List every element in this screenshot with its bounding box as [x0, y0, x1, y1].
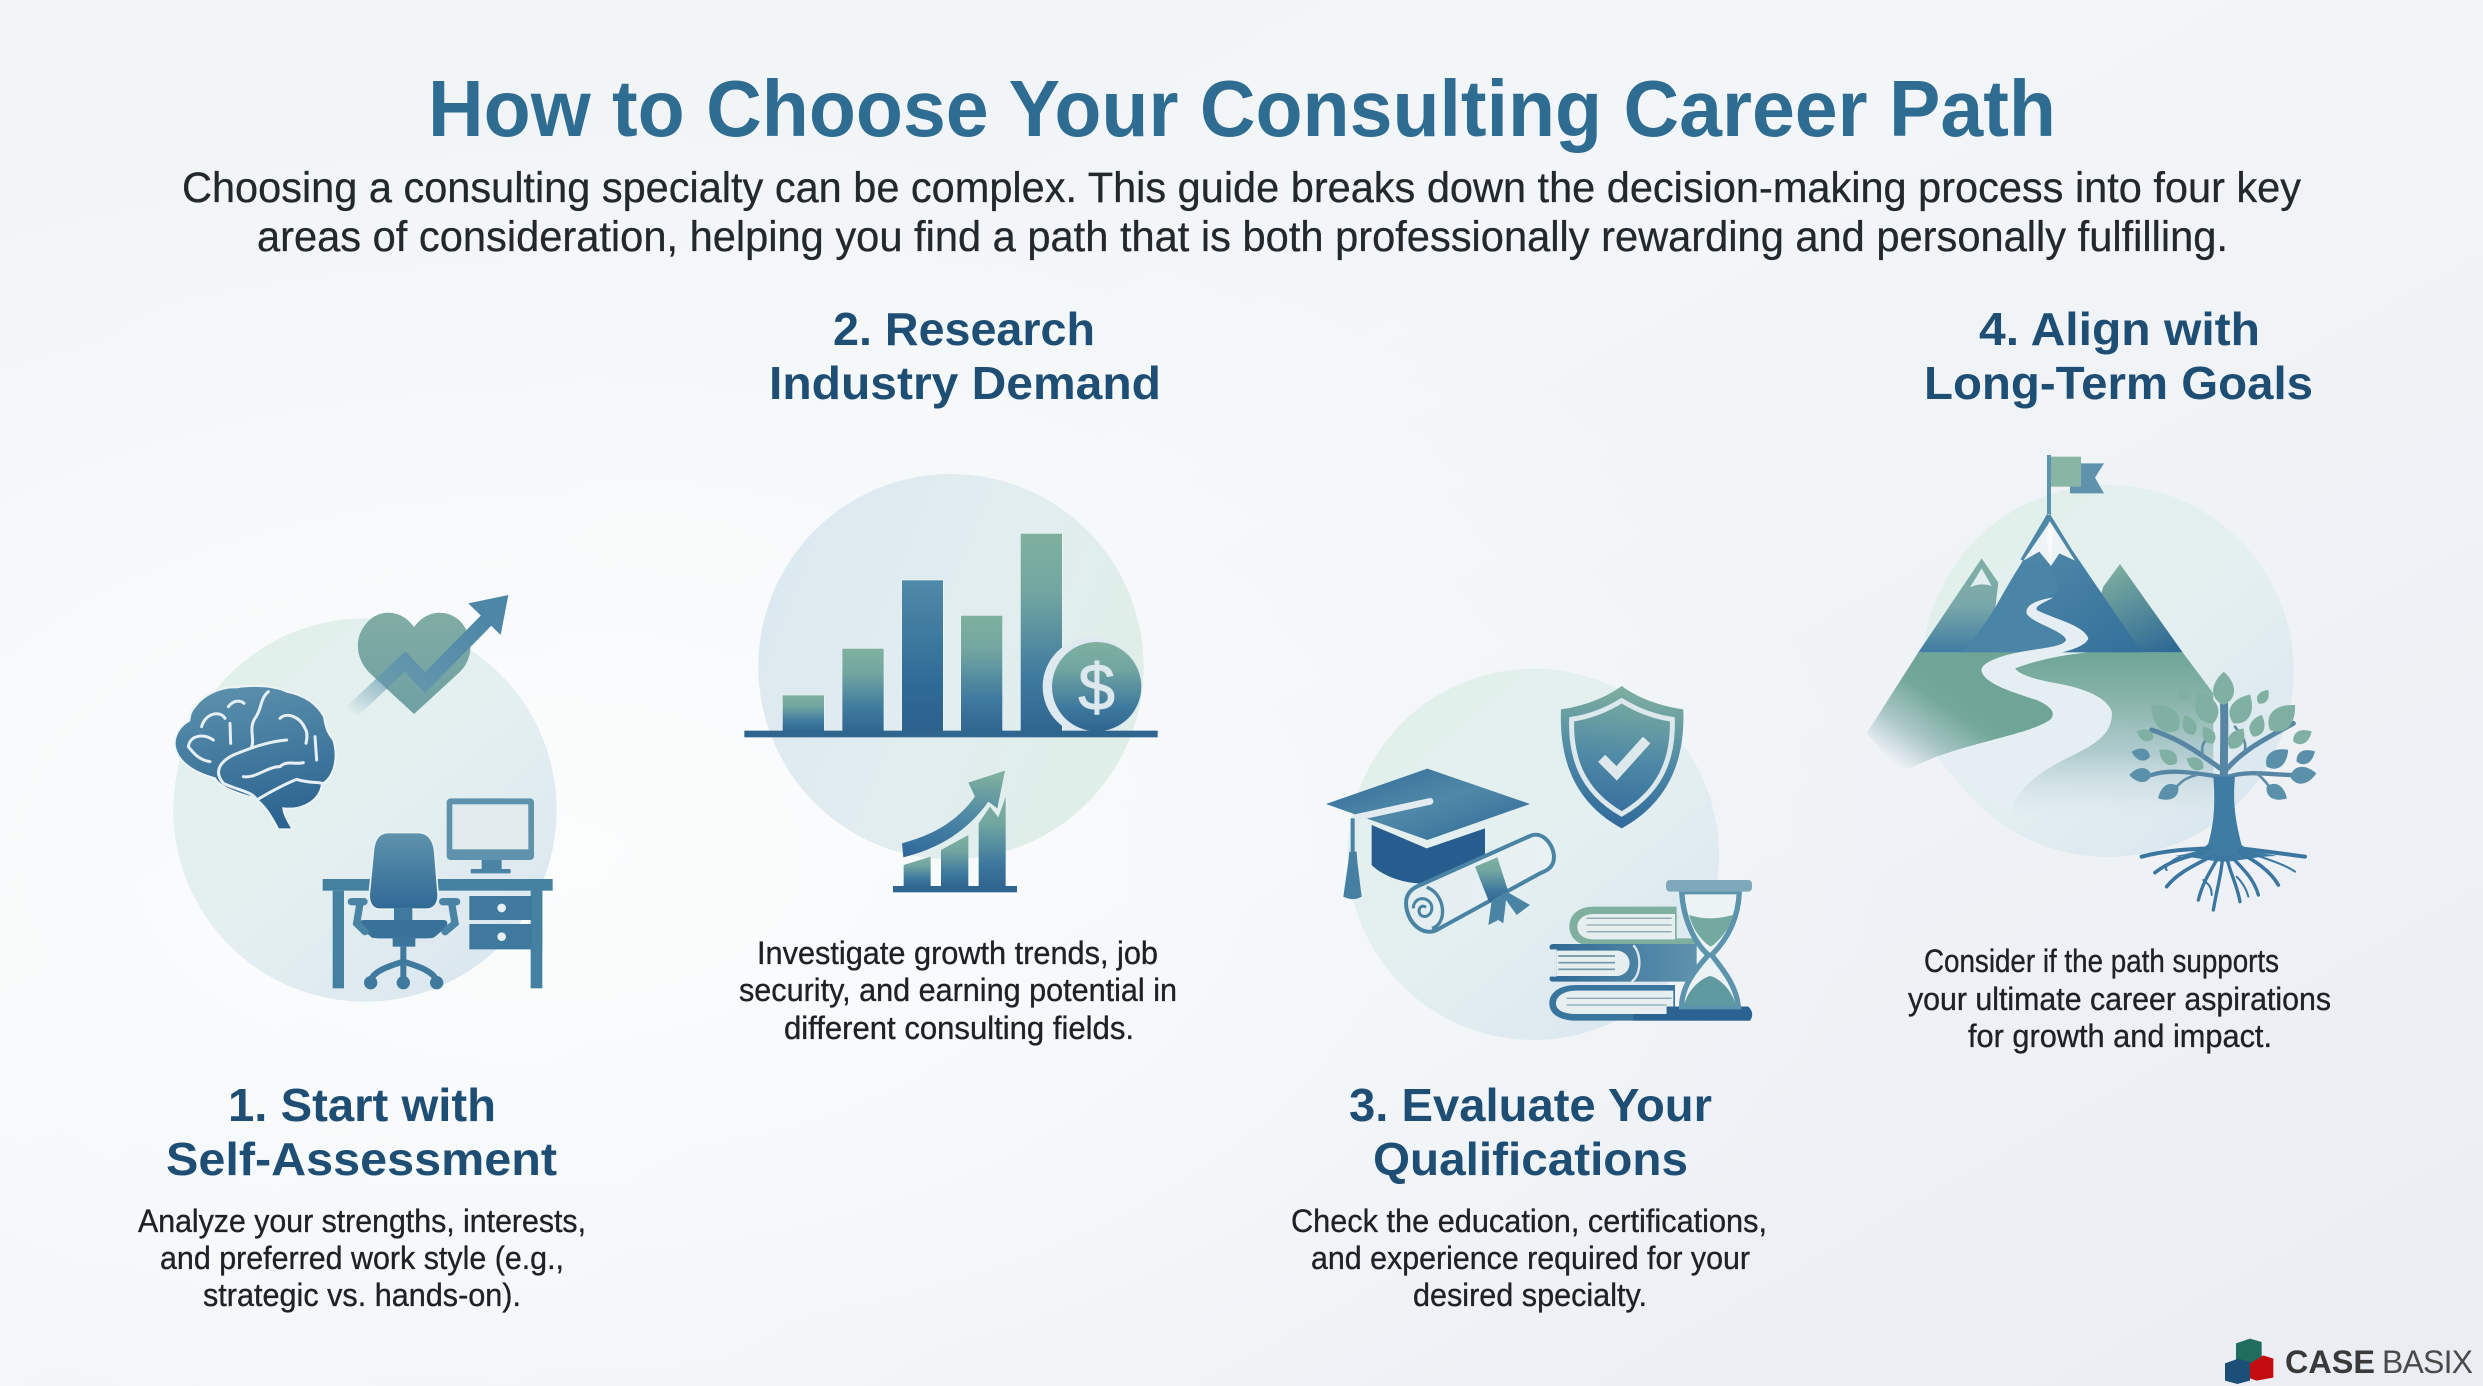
icon: hourglass — [1666, 880, 1752, 1007]
icon: dollar coin: $ — [1078, 650, 1115, 724]
description: security, and earning potential in — [739, 972, 1177, 1008]
chart baseline — [744, 731, 1158, 737]
circle backdrop — [758, 474, 1144, 859]
intro text: Choosing a consulting specialty can be complex. This guide breaks down the decision-making process into four key — [182, 164, 2301, 212]
icon: desk — [323, 879, 553, 988]
heading: 2. Research — [833, 303, 1095, 355]
circle backdrop — [1348, 669, 1719, 1040]
icon group: charts and coin — [744, 474, 1158, 892]
wordmark light part: BASIX — [2382, 1344, 2473, 1380]
icon: monitor — [447, 798, 534, 873]
icon: mountains — [1918, 515, 2183, 652]
icon: stack of books — [1549, 907, 1752, 1021]
icon group: mountain and tree — [1867, 455, 2318, 910]
title: How to Choose Your Consulting Career Path — [428, 64, 2056, 153]
icon group: cap, shield, books — [1326, 669, 1752, 1040]
description: and preferred work style (e.g., — [160, 1240, 564, 1276]
icon group: brain, heart, desk — [173, 595, 557, 1002]
panel: step 2 research industry demand — [739, 303, 1177, 1046]
icon: brain — [175, 686, 336, 829]
icon: graduation cap — [1326, 769, 1530, 899]
intro text: areas of consideration, helping you find a path that is both professionally rewarding and personally fulfilling. — [257, 213, 2228, 261]
heading: 4. Align with — [1979, 303, 2260, 355]
description: Analyze your strengths, interests, — [138, 1203, 586, 1239]
panel: step 1 self-assessment — [138, 595, 586, 1313]
heading — [166, 1079, 557, 1185]
icon: tree with roots — [2129, 671, 2318, 910]
icon: diploma scroll — [1406, 835, 1554, 932]
heading — [1349, 1079, 1712, 1185]
icon: dollar coin — [1043, 637, 1141, 736]
heading — [769, 303, 1161, 409]
description — [1908, 943, 2331, 1054]
icon: heart with rising arrow — [350, 595, 508, 714]
circle backdrop — [173, 618, 557, 1002]
heading — [1924, 303, 2313, 409]
description: for growth and impact. — [1968, 1018, 2272, 1054]
heading: Industry Demand — [769, 357, 1161, 409]
circle backdrop — [1922, 485, 2294, 857]
description: Investigate growth trends, job — [757, 935, 1158, 971]
heading: Self-Assessment — [166, 1133, 557, 1185]
description: strategic vs. hands-on). — [203, 1277, 521, 1313]
description: different consulting fields. — [784, 1010, 1134, 1046]
description — [1291, 1203, 1767, 1313]
heading: Long-Term Goals — [1924, 357, 2313, 409]
bar chart — [783, 534, 1062, 731]
description — [739, 935, 1177, 1046]
heading: 1. Start with — [228, 1079, 496, 1131]
icon: summit flag — [2047, 455, 2104, 514]
icon: shield with check — [1561, 686, 1683, 828]
description: Consider if the path supports — [1924, 943, 2279, 979]
panel: step 4 align with long-term goals — [1867, 303, 2331, 1054]
heading: Qualifications — [1373, 1133, 1688, 1185]
panel: step 3 evaluate qualifications — [1291, 669, 1767, 1313]
icon: small growth chart — [893, 771, 1017, 892]
intro text — [182, 164, 2301, 261]
description — [138, 1203, 586, 1313]
description: desired specialty. — [1413, 1277, 1647, 1313]
icon: ground and winding path — [1867, 597, 2213, 823]
description: and experience required for your — [1311, 1240, 1750, 1276]
description: Check the education, certifications, — [1291, 1203, 1767, 1239]
heading: 3. Evaluate Your — [1349, 1079, 1712, 1131]
wordmark bold part: CASE — [2285, 1344, 2375, 1380]
description: your ultimate career aspirations — [1908, 981, 2331, 1017]
icon: cubes — [2225, 1339, 2273, 1384]
icon: office chair — [351, 833, 457, 989]
logo: CaseBasix — [2225, 1339, 2375, 1384]
